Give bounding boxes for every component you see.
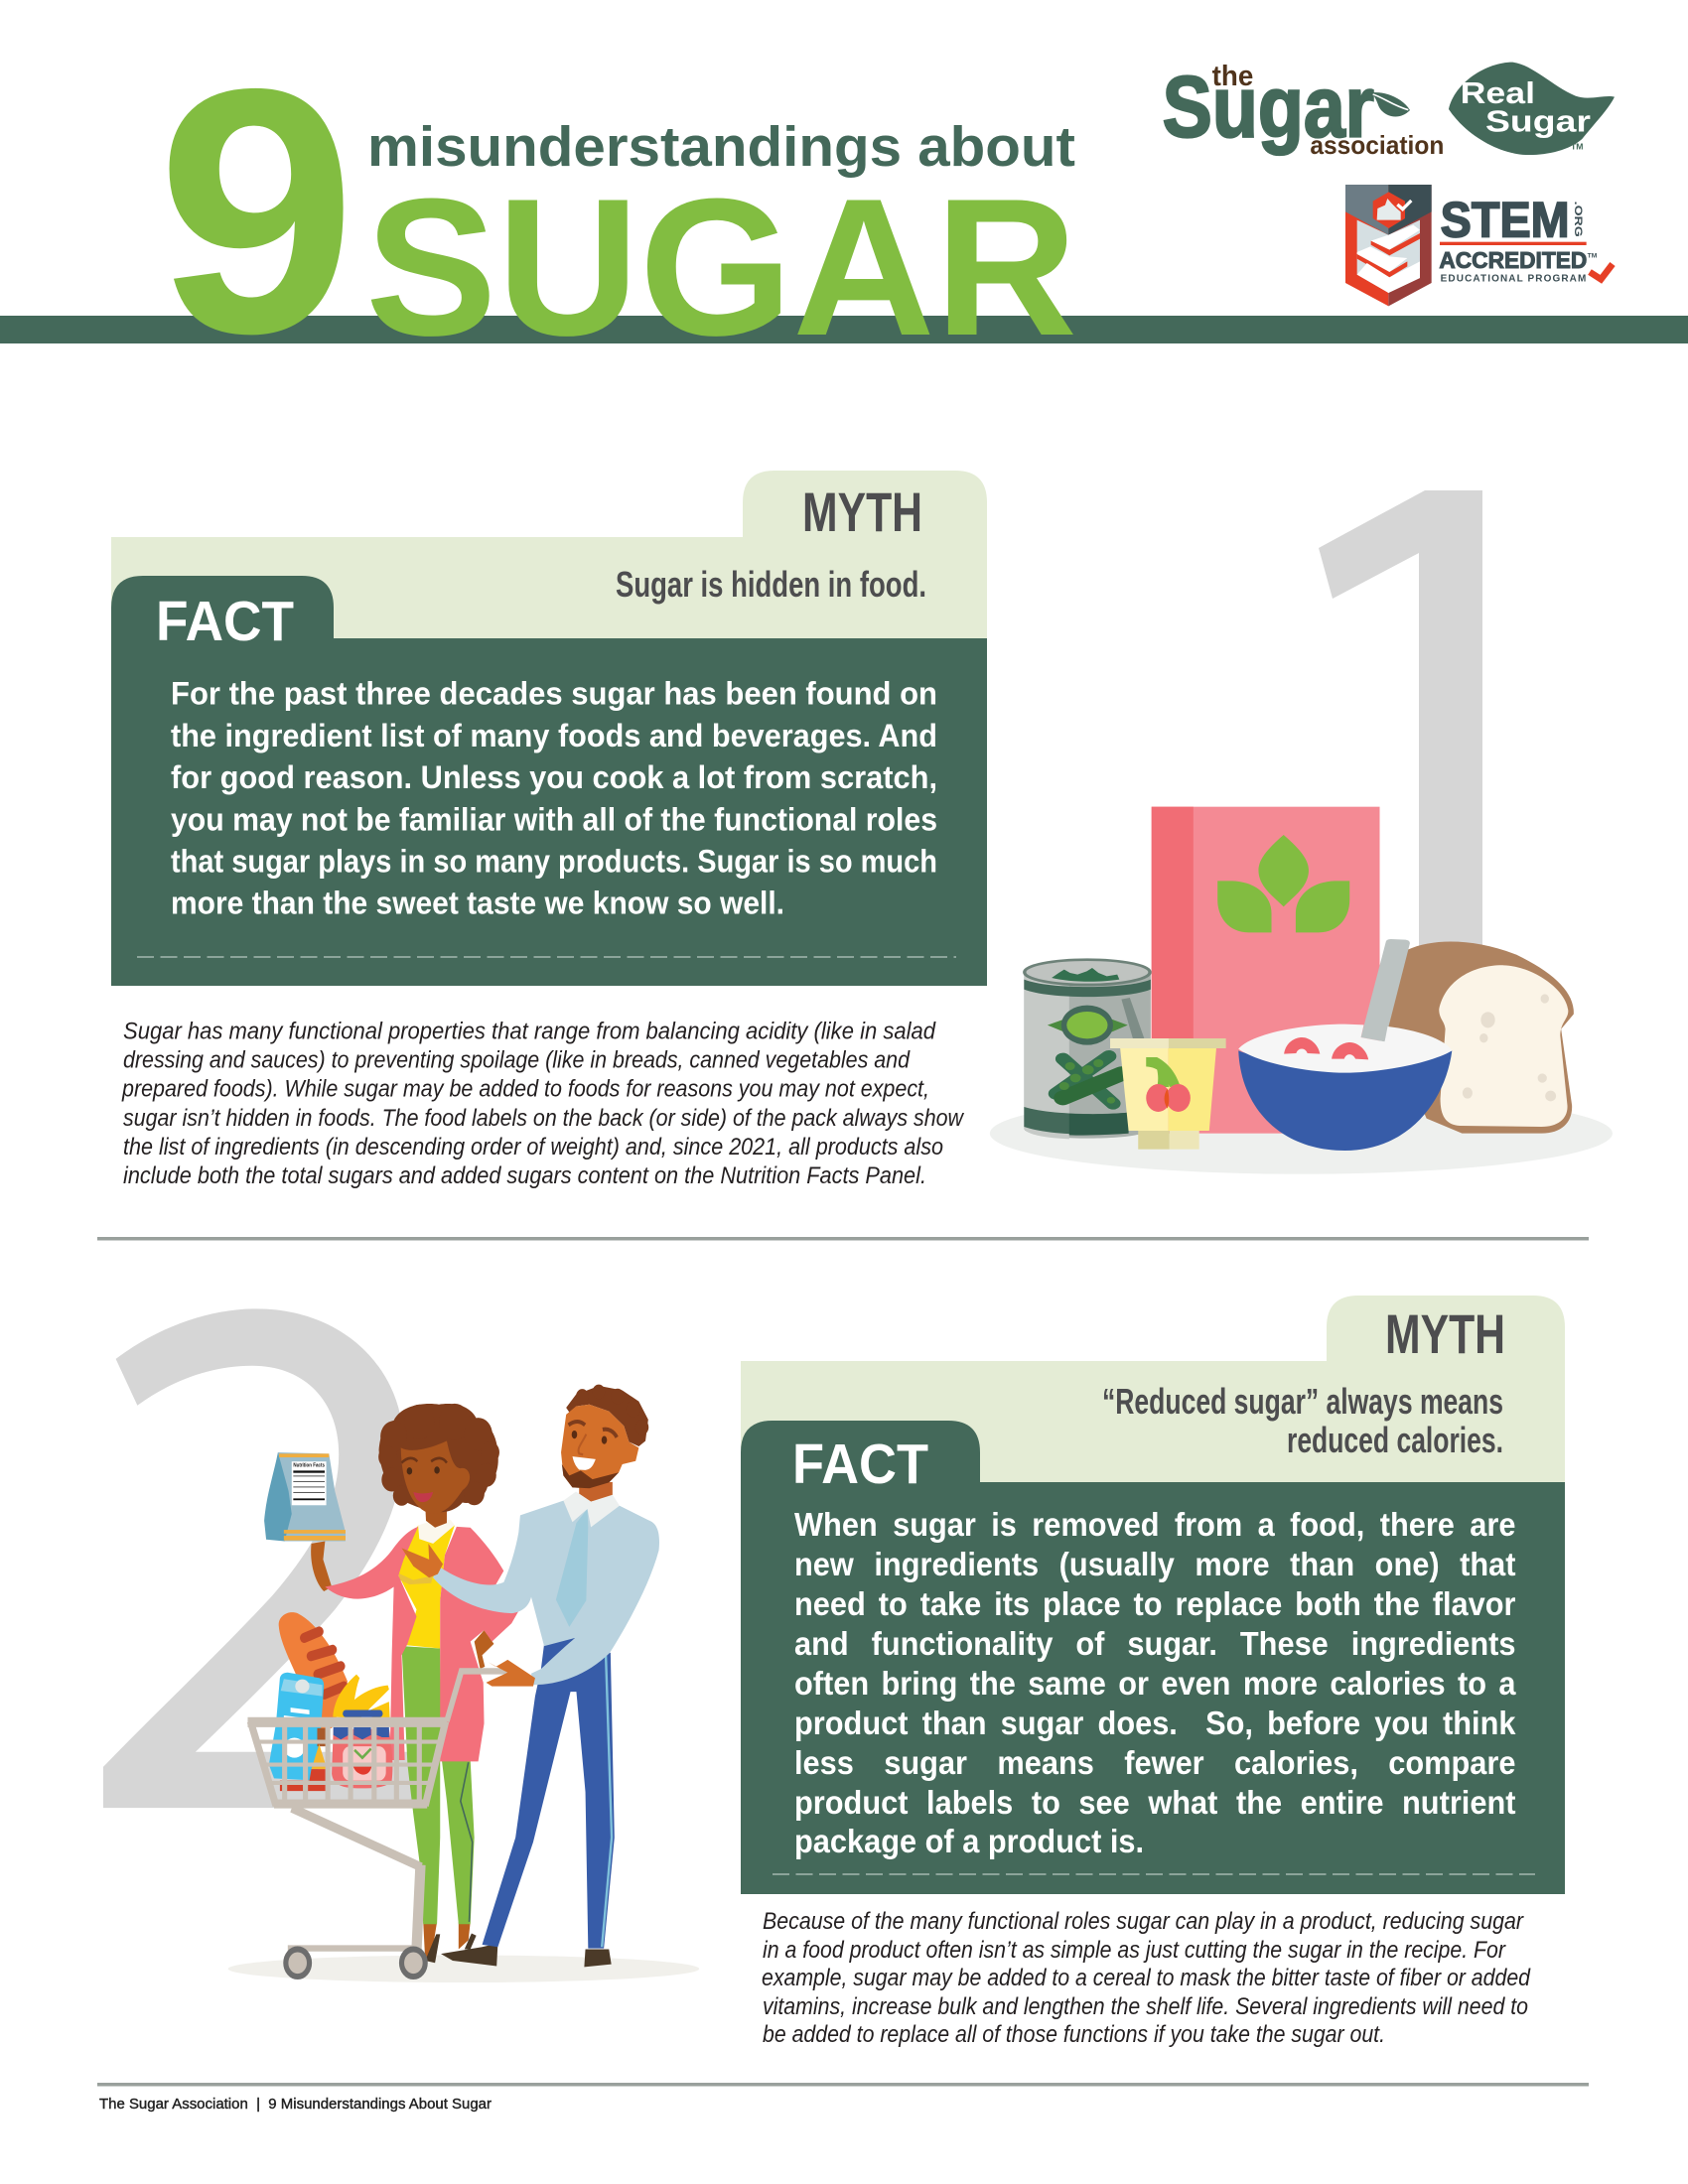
fact body text: the ingredient list of many foods and beverages. And — [171, 718, 937, 753]
fact body text: less sugar means fewer calories, compare — [794, 1744, 1515, 1781]
divider — [97, 2083, 1589, 2087]
logo: STEM.org accredited badge: EDUCATIONAL PROGRAM — [1441, 273, 1586, 284]
fact label: FACT — [156, 590, 294, 653]
myth background — [741, 1296, 1565, 1482]
myth statement: reduced calories. — [1287, 1420, 1503, 1460]
illustration: couple shopping — [228, 1385, 699, 1982]
supporting text 2: Because of the many functional roles sugar can play in a product, reducing sugar — [763, 1908, 1524, 1935]
fact body text — [171, 675, 937, 921]
supporting text 2 — [762, 1908, 1531, 2048]
icon: canned peas — [1024, 960, 1151, 1139]
fact body text: and functionality of sugar. These ingredients — [794, 1625, 1515, 1662]
fact body text: more than the sweet taste we know so well. — [171, 886, 784, 921]
fact background — [111, 576, 987, 986]
myth statement: Sugar is hidden in food. — [616, 564, 926, 605]
logo: the Sugar Association: Sugar — [1163, 58, 1374, 155]
fact body text: For the past three decades sugar has been found on — [171, 675, 937, 711]
fact body text: that sugar plays in so many products. Sugar is so much — [171, 844, 937, 880]
man hair — [566, 1385, 648, 1446]
fact label: FACT — [792, 1433, 928, 1496]
supporting text 1: sugar isn’t hidden in foods. The food labels on the back (or side) of the pack always show — [123, 1105, 964, 1132]
logo: STEM.org accredited badge: ACCREDITED — [1439, 247, 1587, 273]
fact body text: for good reason. Unless you cook a lot from scratch, — [171, 759, 937, 795]
title line: misunderstandings about: misunderstandings about — [367, 115, 1075, 179]
ground shadow — [990, 1093, 1613, 1174]
divider — [97, 1237, 1589, 1241]
myth statement — [1102, 1381, 1503, 1460]
man — [401, 1385, 659, 1967]
supporting text 2: example, sugar may be added to a cereal to mask the bitter taste of fiber or added — [762, 1965, 1531, 1991]
fact background — [741, 1421, 1565, 1894]
logo: STEM.org accredited badge — [1345, 185, 1613, 306]
big numeral 2 — [103, 1308, 433, 1808]
logo: Real Sugar leaf: TM — [1571, 142, 1583, 152]
footer text: The Sugar Association | 9 Misunderstandings About Sugar — [99, 2096, 492, 2113]
icon: cereal box — [1152, 807, 1380, 1134]
icon: bread — [1387, 941, 1574, 1134]
myth statement: “Reduced sugar” always means — [1102, 1381, 1503, 1422]
supporting text 1: Sugar has many functional properties that range from balancing acidity (like in salad — [123, 1019, 936, 1044]
fact body text — [794, 1503, 1569, 1870]
myth label: MYTH — [802, 480, 922, 543]
fact body text: product labels to see what the entire nutrient — [794, 1784, 1515, 1821]
supporting text 2: be added to replace all of those functions if you take the sugar out. — [763, 2021, 1385, 2048]
logos — [1163, 58, 1615, 306]
icon: cherry yogurt cup — [1110, 1038, 1226, 1150]
woman — [311, 1404, 519, 1963]
supporting text 1: dressing and sauces) to preventing spoilage (like in breads, canned vegetables and — [123, 1047, 911, 1074]
cart contents — [269, 1612, 392, 1791]
ground shadow — [228, 1955, 699, 1982]
supporting text 1: prepared foods). While sugar may be added to foods for reasons you may not expect, — [121, 1076, 929, 1103]
illustration: foods — [990, 807, 1613, 1174]
fact body text: you may not be familiar with all of the functional roles — [171, 801, 937, 837]
myth background — [111, 471, 987, 638]
woman hair — [378, 1404, 499, 1512]
fact body text: When sugar is removed from a food, there are — [794, 1506, 1515, 1543]
logo: STEM.org accredited badge: STEM — [1441, 192, 1570, 247]
logo: Real Sugar leaf: Real — [1461, 75, 1535, 110]
panel: myth and fact 2 — [741, 1296, 1569, 1894]
fact body text: need to take its place to replace both the flavor — [794, 1585, 1515, 1622]
title — [157, 17, 1077, 406]
supporting text 2: in a food product often isn’t as simple as just cutting the sugar in the recipe. For — [763, 1937, 1506, 1964]
fact body text: new ingredients (usually more than one) that — [794, 1546, 1515, 1582]
icon: package with nutrition label: Nutrition Facts — [293, 1462, 325, 1468]
fact body text: often bring the same or even more calories to a — [794, 1665, 1515, 1702]
fact body text: product than sugar does. So, before you think — [794, 1705, 1515, 1741]
title word: SUGAR: SUGAR — [365, 158, 1077, 376]
myth label: MYTH — [1385, 1302, 1505, 1365]
supporting text 1: include both the total sugars and added sugars content on the Nutrition Facts Panel. — [123, 1162, 926, 1189]
supporting text 1: the list of ingredients (in descending order of weight) and, since 2021, all products also — [123, 1134, 943, 1160]
supporting text 1 — [121, 1019, 964, 1189]
big numeral 1 — [1319, 490, 1482, 953]
logo: the Sugar Association: the — [1212, 61, 1253, 92]
logo: Real Sugar leaf: Sugar — [1485, 104, 1591, 139]
logo: STEM.org accredited badge: TM — [1588, 252, 1598, 259]
panel: myth and fact 1 — [111, 471, 987, 986]
icon: package with nutrition label — [264, 1452, 346, 1542]
supporting text 2: vitamins, increase bulk and lengthen the shelf life. Several ingredients will need to — [763, 1993, 1528, 2020]
logo: STEM.org accredited badge: .ORG — [1572, 202, 1584, 237]
cart wheels — [286, 1950, 425, 1977]
icon: shopping cart — [247, 1671, 513, 1950]
header band — [0, 316, 1688, 343]
logo: the Sugar Association: association — [1310, 130, 1444, 160]
icon: cereal bowl with spoon — [1238, 939, 1452, 1151]
logo: Real Sugar leaf — [1449, 63, 1615, 155]
fact body text: package of a product is. — [794, 1823, 1144, 1859]
title numeral 9: 9 — [157, 17, 356, 406]
